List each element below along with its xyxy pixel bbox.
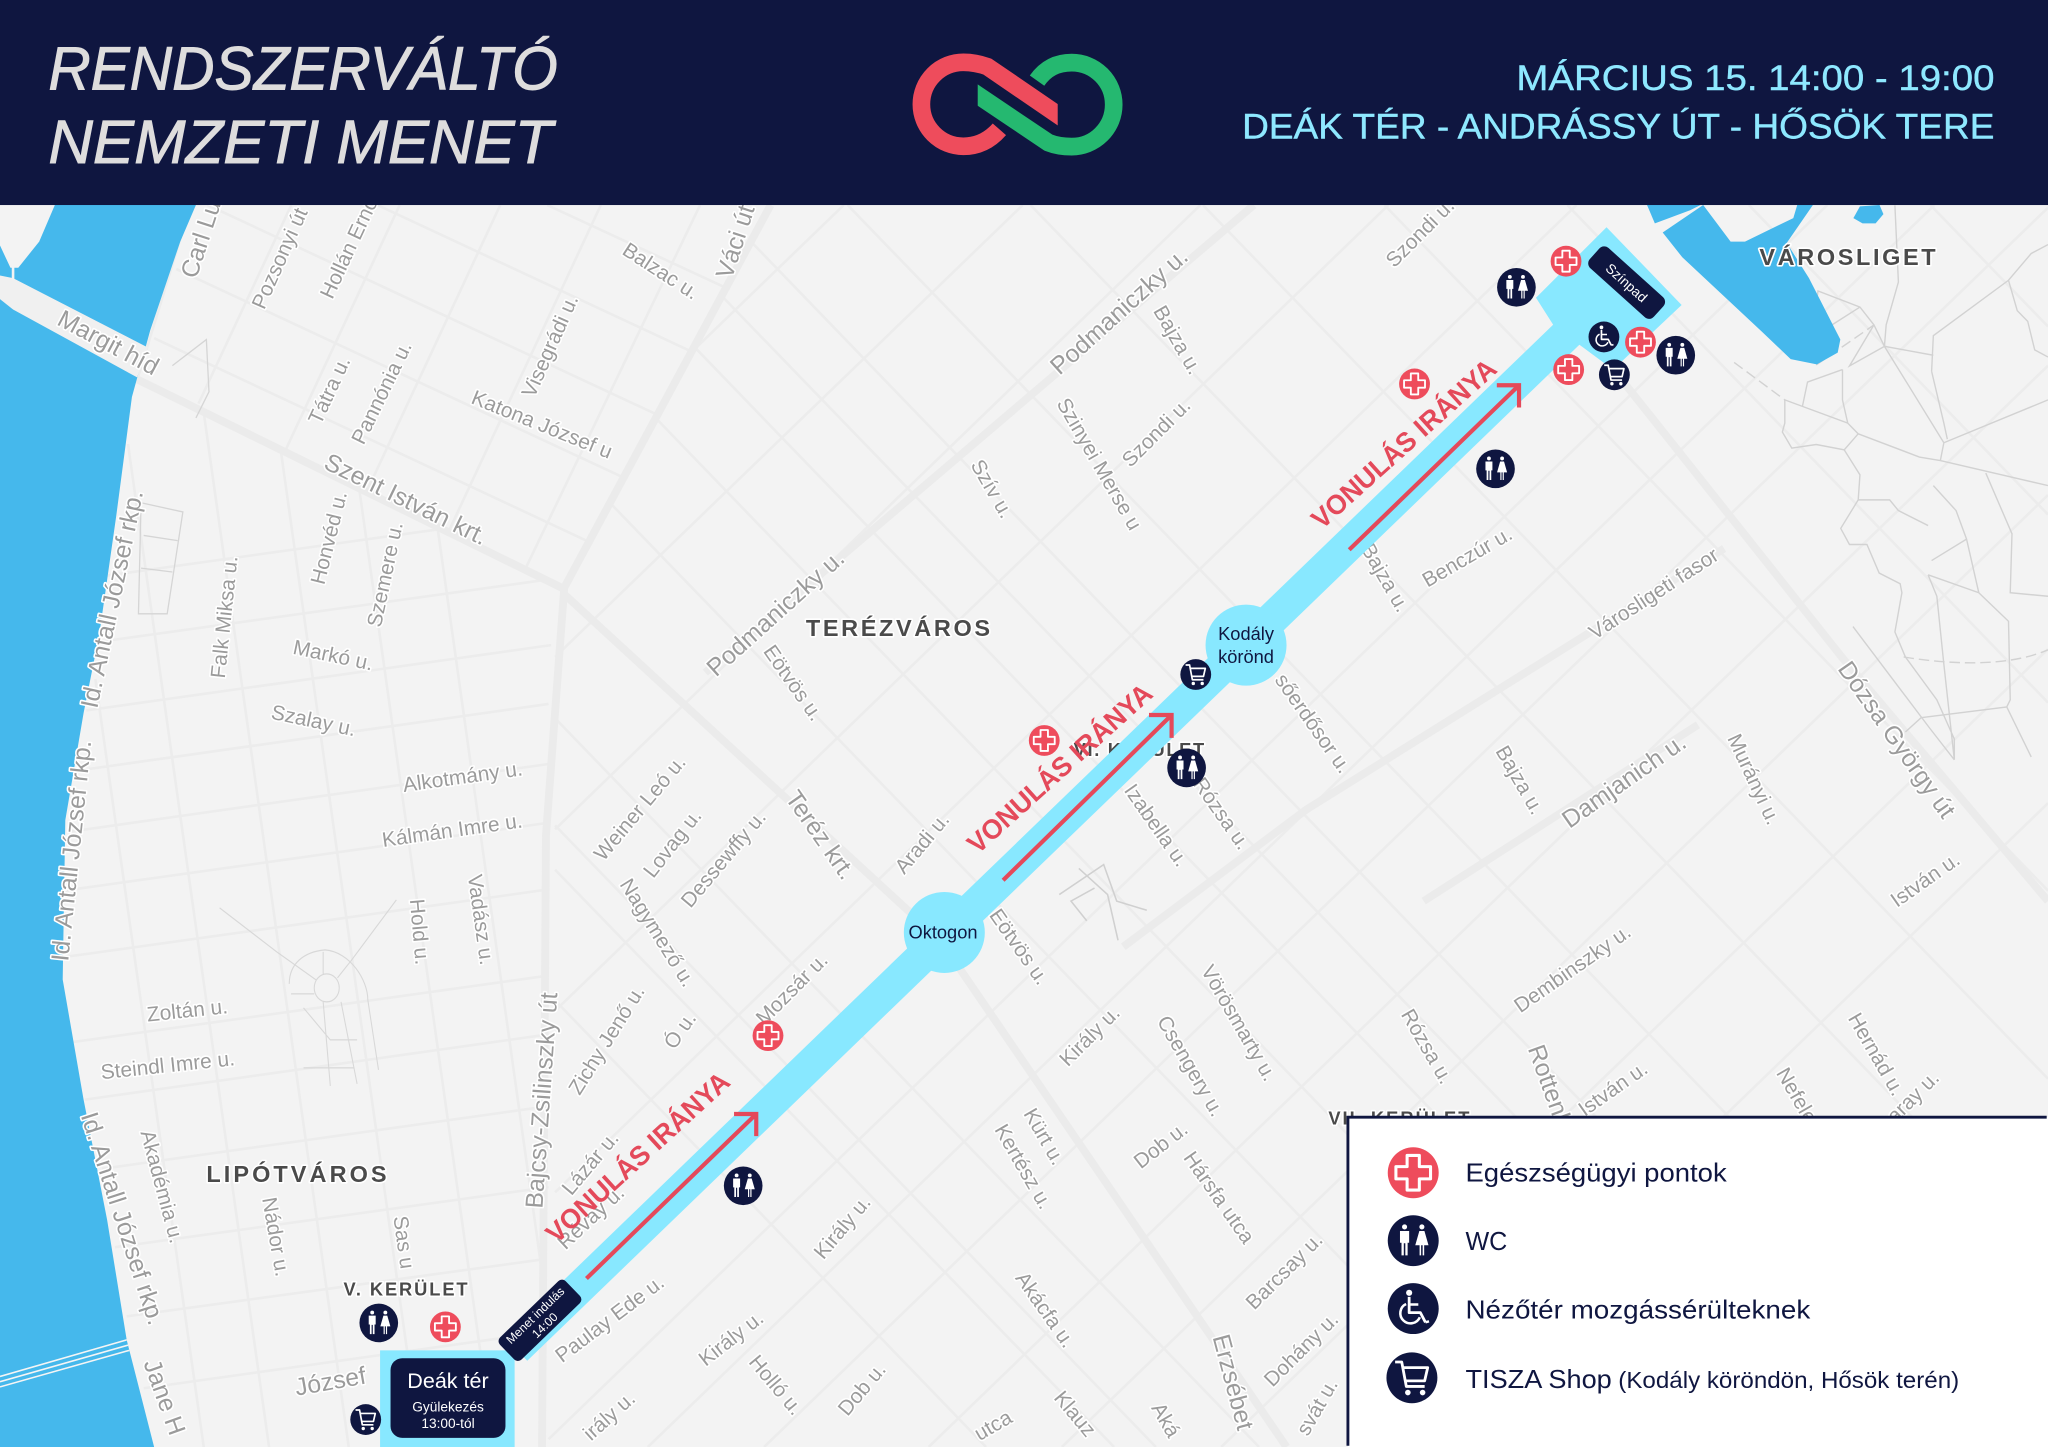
- water: Danube: [0, 205, 196, 1447]
- street labels: Kálmán Imre u.: [381, 809, 524, 852]
- label: Menet indulás pill: Menet indulás: [503, 1284, 567, 1347]
- district labels: TERÉZVÁROS: [806, 614, 990, 641]
- street labels: Bajza u.: [1148, 302, 1206, 379]
- street labels: Rózsa u.: [1188, 773, 1254, 854]
- Chain bridge: [0, 1340, 129, 1387]
- street labels: Lázár u.: [558, 1127, 624, 1200]
- street labels: Carl Lutz: [176, 179, 233, 282]
- street labels: Weiner Leó u.: [590, 751, 691, 865]
- street labels: Vadász u.: [463, 873, 498, 967]
- street labels: Pannónia u.: [347, 338, 417, 448]
- street labels: Városligeti fasor: [1585, 544, 1723, 644]
- arrow: march direction 2: [1003, 715, 1172, 880]
- icon: first aid, Hősök tere top: [1551, 246, 1581, 277]
- street labels: Nagymező u.: [615, 875, 700, 991]
- label: Kodály körönd: Kodály: [1218, 623, 1275, 644]
- legend item: WC: [1388, 1215, 1507, 1266]
- icon: first aid, Hősök tere right: [1625, 327, 1656, 358]
- icon: wheelchair area: [1589, 322, 1619, 352]
- street labels: Paulay Ede u.: [551, 1271, 669, 1367]
- street labels: Nádor u.: [257, 1195, 294, 1278]
- street labels: Alkotmány u.: [401, 757, 524, 797]
- park paths: Liszt Ferenc tér and Szent István park: [138, 340, 1147, 940]
- street labels: svát u.: [1292, 1375, 1343, 1440]
- title: RENDSZERVÁLTÓ: [48, 34, 558, 103]
- icon: WC, Deák tér: [359, 1304, 398, 1342]
- street labels: Hollán Ernő: [316, 194, 383, 302]
- district labels: VI. KERÜLET: [1074, 739, 1204, 760]
- street labels: Margit híd: [53, 306, 163, 381]
- icon: WC, Andrássy middle: [1167, 749, 1206, 787]
- icon: first aid, Hősök tere bottom: [1553, 354, 1584, 385]
- icon: first aid, Deák tér: [430, 1311, 461, 1342]
- street labels: Izabella u.: [1119, 780, 1193, 871]
- street labels: Zoltán u.: [146, 995, 229, 1027]
- street labels: Sas u: [388, 1214, 419, 1270]
- street labels: Zichy Jenő u.: [564, 981, 650, 1099]
- street labels: József: [293, 1363, 368, 1402]
- district labels: VÁROSLIGET: [1759, 243, 1936, 270]
- icon: WC, Hősök tere left: [1497, 268, 1536, 307]
- legend item: first aid: [1388, 1147, 1728, 1198]
- street labels: Dob u.: [1130, 1117, 1192, 1173]
- street labels: Murányi u.: [1722, 730, 1785, 829]
- street labels: Podmaniczky u.: [702, 545, 850, 682]
- street labels: Akácfa u.: [1011, 1268, 1079, 1352]
- arrow: march direction 1: [586, 1114, 756, 1279]
- street labels: Podmaniczky u.: [1045, 243, 1194, 380]
- street labels: István u.: [1574, 1057, 1652, 1121]
- legend item: accessible area: Nézőtér mozgássérülteknek: [1465, 1294, 1811, 1324]
- date and route: [1242, 59, 1994, 146]
- park paths: Bazilika and Szabadság tér: [220, 900, 396, 1086]
- street labels: Aká: [1147, 1399, 1185, 1442]
- street labels: Nefelejcs: [1771, 1064, 1834, 1150]
- street labels: Tátra u.: [304, 353, 355, 428]
- street labels: Rózsa u.: [1396, 1005, 1457, 1088]
- street labels: Pozsonyi út: [248, 204, 313, 313]
- street labels: Bajza u.: [1356, 539, 1414, 616]
- street labels: Kürt u.: [1019, 1104, 1069, 1169]
- street labels: Hold u.: [405, 898, 434, 966]
- label: Színpad pill: Színpad: [1603, 261, 1650, 305]
- Margit bridge: [0, 266, 148, 377]
- street labels: Garay u.: [1871, 1066, 1944, 1139]
- street labels: Szondi u.: [1381, 194, 1459, 272]
- label: Menet indulás pill: [496, 1277, 584, 1363]
- street labels: Barcsay u.: [1242, 1228, 1328, 1314]
- text: march direction 3: VONULÁS IRÁNYA: [1305, 352, 1503, 535]
- icon: WC, Andrássy upper: [1476, 450, 1515, 488]
- title: [48, 34, 558, 177]
- street labels: Bajcsy-Zsilinszky út: [521, 991, 563, 1209]
- icon: first aid, Andrássy middle: [1029, 725, 1060, 756]
- street labels: Teréz krt.: [780, 786, 860, 885]
- street labels: Klauz: [1049, 1387, 1100, 1441]
- label: Deák tér box: Deák tér: [407, 1369, 489, 1393]
- street labels: Király u.: [695, 1306, 768, 1371]
- water: Városliget lake: [1647, 205, 1883, 364]
- street labels: Dembinszky u.: [1510, 920, 1635, 1018]
- street labels: Szinyei Merse u: [1052, 394, 1146, 534]
- street labels: Steindl Imre u.: [100, 1047, 236, 1084]
- street labels: Dessewffy u.: [677, 806, 771, 912]
- street labels: Id. Antall József rkp.: [47, 739, 97, 962]
- label: Menet indulás pill: 14:00: [529, 1310, 561, 1341]
- street labels: Balzac u.: [618, 238, 703, 304]
- street labels: Szondi u.: [1118, 394, 1195, 472]
- label: Oktogon: Oktogon: [908, 921, 978, 942]
- Margaret island: [0, 205, 55, 268]
- street labels: Akadémia u.: [136, 1128, 188, 1246]
- district labels: VII. KERÜLET: [1328, 1107, 1469, 1128]
- legend item: TISZA shop: TISZA Shop: [1465, 1364, 1612, 1394]
- icon: first aid, Andrássy upper: [1399, 369, 1430, 399]
- street labels: Falk Miksa u.: [207, 555, 243, 679]
- district labels: [206, 243, 1936, 1300]
- street labels: Csengery u.: [1152, 1012, 1228, 1121]
- street labels: Aradi u.: [890, 808, 954, 878]
- street labels: Jane H: [138, 1356, 190, 1439]
- legend item: accessible area: [1388, 1283, 1811, 1334]
- text: march direction 2: VONULÁS IRÁNYA: [961, 677, 1158, 859]
- street labels: Váci út: [711, 202, 761, 282]
- street labels: utca: [970, 1406, 1016, 1446]
- street labels: Benczúr u.: [1418, 522, 1516, 592]
- street labels: Szemere u.: [363, 520, 408, 629]
- street labels: Markó u.: [291, 636, 375, 675]
- street labels: Mozsár u.: [752, 949, 833, 1030]
- street labels: Kertész u.: [990, 1120, 1057, 1213]
- street labels: Id. Antall József rkp.: [75, 1109, 169, 1328]
- street labels: Dob u.: [834, 1358, 891, 1420]
- street labels: Visegrádi u.: [518, 291, 583, 401]
- street labels: Király u.: [1055, 1001, 1125, 1071]
- icon: WC, Andrássy lower: [724, 1166, 763, 1205]
- street labels: Bajza u.: [1491, 742, 1548, 819]
- label: Kodály körönd: körönd: [1218, 646, 1274, 667]
- icon: WC, Hősök tere right: [1656, 336, 1695, 375]
- street labels: Szent István krt.: [320, 449, 491, 551]
- icon: shop, Kodály körönd: [1180, 659, 1211, 690]
- district labels: LIPÓTVÁROS: [206, 1160, 387, 1187]
- street labels: Hársfa utca: [1179, 1147, 1259, 1248]
- street labels: Vörösmarty u.: [1196, 961, 1281, 1085]
- date and route: DEÁK TÉR - ANDRÁSSY ÚT - HŐSÖK TERE: [1242, 107, 1994, 146]
- panel: legend: [1348, 1117, 2048, 1447]
- street labels: sőerdősor u.: [1270, 670, 1355, 778]
- legend item: first aid: Egészségügyi pontok: [1465, 1158, 1728, 1188]
- street labels: Szív u.: [966, 456, 1018, 522]
- icon: first aid, Mozsár u.: [753, 1020, 783, 1051]
- street labels: Szalay u.: [269, 701, 358, 741]
- street labels: Holló u.: [744, 1351, 807, 1420]
- route: Andrássy út band with squares and circles: [380, 227, 1682, 1447]
- text: march direction 1: VONULÁS IRÁNYA: [540, 1065, 736, 1249]
- logo: infinity mark: [921, 62, 1114, 147]
- street labels: Király u.: [810, 1191, 876, 1264]
- street labels: Erzsébet: [1207, 1332, 1258, 1433]
- street labels: Dózsa György út: [1832, 657, 1960, 824]
- label: Színpad pill: [1586, 244, 1668, 322]
- label: Deák tér box: Gyülekezés: [412, 1400, 484, 1415]
- legend item: TISZA shop: (Kodály köröndön, Hősök terén): [1618, 1367, 1959, 1393]
- street labels: Lovag u.: [639, 805, 706, 882]
- street labels: Révay u.: [553, 1181, 629, 1254]
- arrow: march direction 3: [1349, 385, 1519, 550]
- legend item: WC: WC: [1465, 1226, 1507, 1256]
- street labels: Hernád u.: [1843, 1009, 1909, 1100]
- street labels: Honvéd u.: [307, 489, 352, 587]
- label: Kodály körönd: [1218, 623, 1275, 667]
- street labels: Katona József u: [468, 386, 616, 464]
- street labels: Eötvös u.: [984, 905, 1053, 989]
- date and route: MÁRCIUS 15. 14:00 - 19:00: [1516, 59, 1994, 98]
- panel: header band: [0, 0, 2048, 205]
- street labels: Dohány u.: [1260, 1308, 1343, 1391]
- label: Deák tér box: [391, 1358, 505, 1438]
- park paths: [1734, 205, 2048, 760]
- street labels: Rottenbiller: [1522, 1041, 1590, 1168]
- street labels: Id. Antall József rkp.: [77, 488, 149, 711]
- label: Deák tér box: 13:00-tól: [421, 1416, 475, 1431]
- street labels: István u.: [1886, 848, 1964, 912]
- title: NEMZETI MENET: [48, 108, 557, 177]
- street labels: Ó u.: [660, 1008, 701, 1053]
- icon: shop, Hősök tere: [1599, 359, 1630, 390]
- street labels: Eötvös u.: [759, 641, 827, 725]
- legend item: TISZA shop: [1386, 1352, 1959, 1403]
- street labels: irály u.: [579, 1387, 640, 1445]
- icon: shop, Deák tér: [350, 1404, 381, 1435]
- district labels: V. KERÜLET: [344, 1279, 468, 1300]
- street labels: Damjanich u.: [1557, 729, 1691, 834]
